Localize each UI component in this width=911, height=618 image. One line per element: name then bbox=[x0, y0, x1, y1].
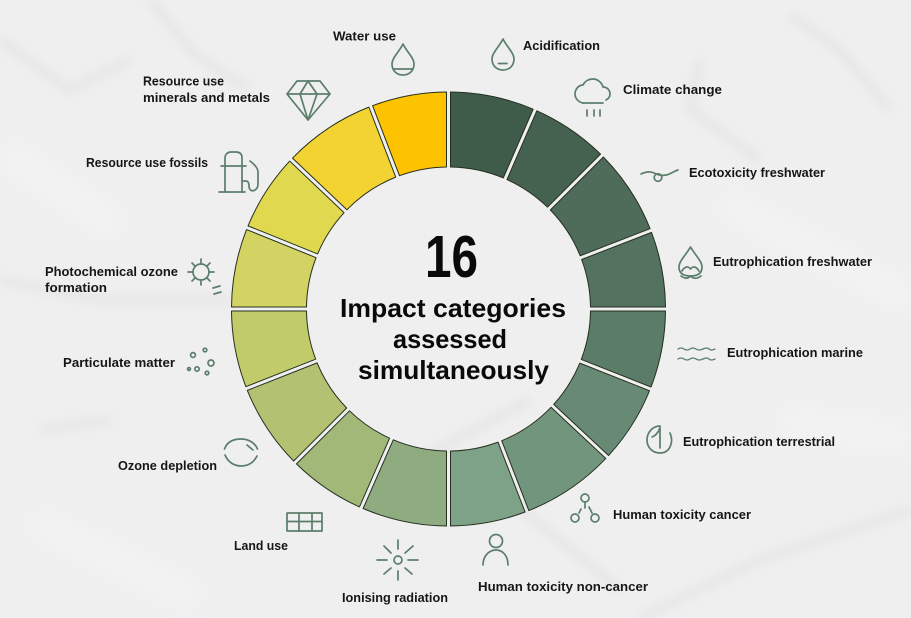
segment: eutrophication marine bbox=[581, 311, 666, 387]
icon: leaf in circle bbox=[647, 426, 672, 453]
segment: ozone depletion bbox=[247, 363, 347, 461]
icon: diamond bbox=[287, 81, 330, 120]
segment: resource use minerals and metals bbox=[292, 107, 396, 210]
label: climate change: Climate change bbox=[623, 82, 722, 97]
segment: particulate matter bbox=[232, 311, 316, 387]
segment: acidification bbox=[450, 92, 533, 178]
label: human toxicity cancer: Human toxicity cancer bbox=[613, 507, 751, 522]
icon: squiggle bbox=[641, 170, 678, 181]
label: resource use fossils: Resource use fossils bbox=[86, 155, 208, 170]
label: particulate matter: Particulate matter bbox=[63, 355, 175, 370]
subtitle line 3: simultaneously bbox=[358, 355, 550, 385]
icon: ozone ring bbox=[224, 439, 258, 466]
donut ring of 16 impact categories bbox=[232, 92, 666, 526]
icon: particles bbox=[188, 348, 214, 375]
label: acidification: Acidification bbox=[523, 38, 600, 53]
label: resource use minerals and metals: minerals and metals bbox=[143, 90, 270, 105]
subtitle line 1: Impact categories bbox=[340, 293, 566, 323]
icon: land grid bbox=[287, 513, 322, 531]
label: photochemical ozone formation bbox=[45, 264, 178, 295]
segment: photochemical ozone formation bbox=[232, 230, 316, 307]
icon: acid drop bbox=[492, 39, 514, 70]
segment: human toxicity non-cancer bbox=[450, 442, 525, 526]
segment: eutrophication freshwater bbox=[582, 232, 666, 307]
label: eutrophication terrestrial: Eutrophication terrestrial bbox=[683, 434, 835, 449]
segment: climate change bbox=[507, 111, 601, 207]
segment: resource use fossils bbox=[248, 161, 344, 254]
label: resource use minerals and metals: Resource use bbox=[143, 74, 224, 88]
segment: ecotoxicity freshwater bbox=[550, 157, 650, 256]
label: resource use minerals and metals bbox=[143, 74, 270, 105]
segment: ionising radiation bbox=[363, 440, 446, 526]
segment: land use bbox=[296, 411, 390, 507]
icon: rain cloud bbox=[575, 79, 610, 116]
label: photochemical ozone formation: formation bbox=[45, 280, 107, 295]
label: photochemical ozone formation: Photochemical ozone bbox=[45, 264, 178, 279]
big number 16: 16 bbox=[425, 224, 478, 290]
label: ionising radiation: Ionising radiation bbox=[342, 590, 448, 605]
label: ecotoxicity freshwater: Ecotoxicity freshwater bbox=[689, 165, 825, 180]
centre heading bbox=[340, 224, 566, 385]
segment: eutrophication terrestrial bbox=[554, 363, 650, 456]
icon: water drop bbox=[392, 44, 414, 75]
icon: molecules bbox=[571, 494, 599, 522]
label: water use: Water use bbox=[333, 28, 396, 44]
subtitle line 2: assessed bbox=[393, 324, 507, 354]
label: eutrophication marine: Eutrophication marine bbox=[727, 345, 863, 360]
segment: human toxicity cancer bbox=[502, 407, 606, 511]
label: human toxicity non-cancer: Human toxicity non-cancer bbox=[478, 579, 648, 594]
icon: sun with haze bbox=[188, 259, 221, 294]
label: ozone depletion: Ozone depletion bbox=[118, 458, 217, 473]
segment: water use bbox=[373, 92, 446, 176]
label: eutrophication freshwater: Eutrophication freshwater bbox=[713, 254, 872, 269]
icon: drop with waves bbox=[679, 247, 702, 278]
icon: person bbox=[483, 534, 508, 565]
label: land use: Land use bbox=[234, 538, 288, 553]
icon: radiation burst bbox=[377, 540, 418, 580]
icon: waves bbox=[678, 348, 715, 360]
icon: fuel pump bbox=[219, 152, 258, 192]
